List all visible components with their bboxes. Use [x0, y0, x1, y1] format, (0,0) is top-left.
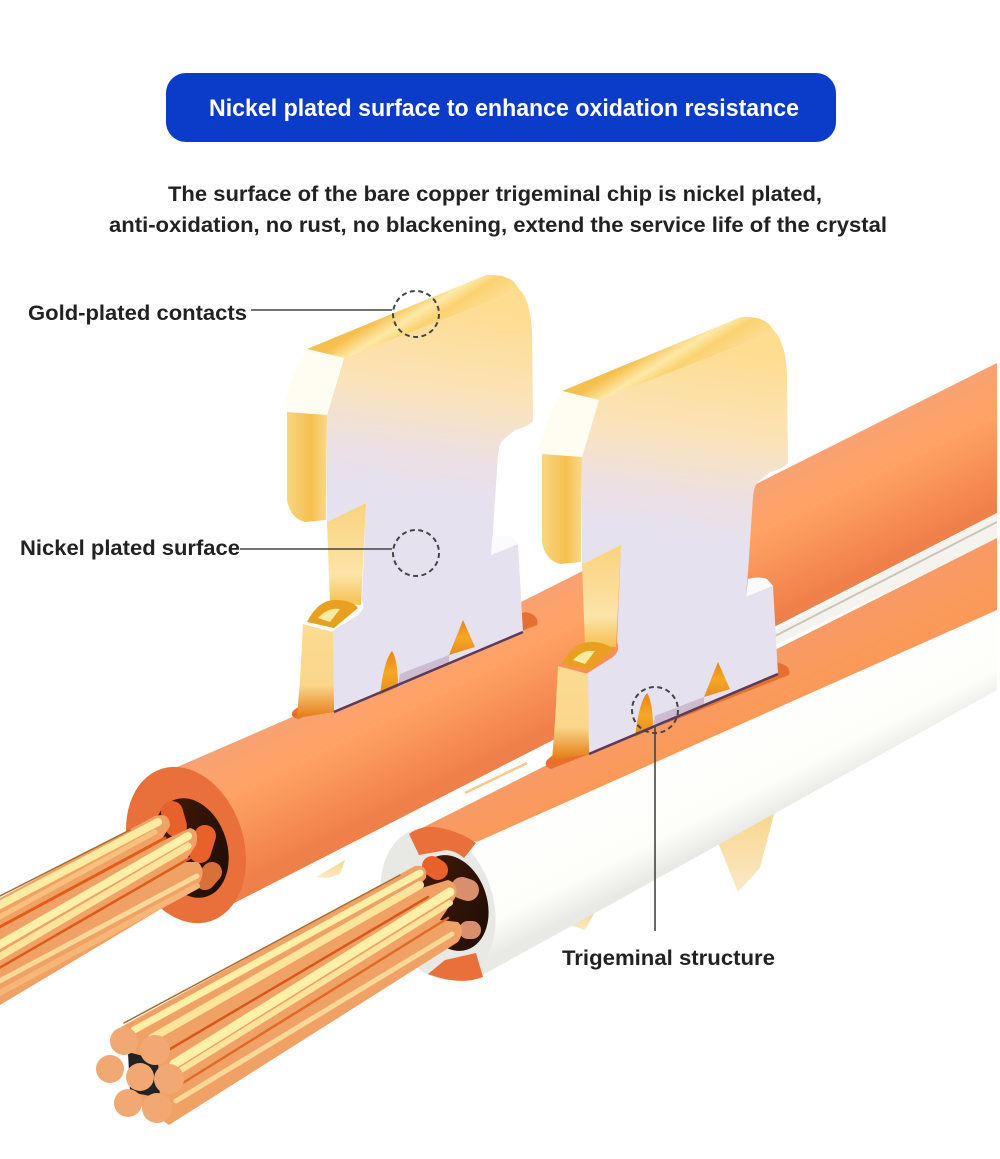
opening — [404, 846, 500, 960]
slot in orange wire — [292, 612, 538, 719]
inner strand tips — [432, 866, 438, 870]
pale strip between wires — [465, 763, 527, 793]
white gap line between wires — [775, 513, 997, 645]
orange sheath — [410, 538, 997, 842]
strand highlights — [124, 875, 400, 1023]
orange ring top — [409, 827, 476, 858]
strand mass — [121, 866, 462, 1125]
strand highlights — [0, 830, 130, 896]
chip 2 — [539, 317, 788, 760]
label: trigeminal structure — [562, 687, 775, 970]
wire end ring — [107, 751, 265, 939]
subtitle text: anti-oxidation, no rust, no blackening, extend the service life of the crystal — [109, 213, 887, 237]
orange ring bottom — [428, 953, 483, 981]
copper strands, left wire — [0, 812, 212, 1005]
subtitle text: The surface of the bare copper trigeminal chip is nickel plated, — [168, 182, 822, 206]
strand end faces — [96, 1027, 184, 1123]
white end ring — [362, 813, 514, 995]
title banner — [166, 73, 836, 142]
strand mass — [0, 815, 203, 1005]
wire body — [175, 363, 997, 918]
slot in front wire — [546, 662, 789, 769]
title banner: Nickel plated surface to enhance oxidation resistance — [209, 95, 799, 122]
front wire — [362, 538, 997, 995]
orange wire (back) — [107, 363, 997, 939]
label: trigeminal structure: Trigeminal structure — [562, 946, 775, 970]
copper strands, front wire — [96, 866, 472, 1125]
white sheath — [470, 610, 997, 982]
label: gold-plated contacts: Gold-plated contacts — [28, 301, 247, 325]
inner strand tips — [172, 812, 176, 826]
wire opening — [141, 788, 241, 908]
label: gold-plated contacts — [28, 291, 439, 337]
label: nickel plated surface: Nickel plated surface — [20, 536, 240, 560]
chip 1 — [284, 275, 533, 718]
label: nickel plated surface — [20, 530, 439, 576]
hidden contact pins below the wires — [316, 810, 775, 930]
subtitle text — [109, 182, 887, 237]
